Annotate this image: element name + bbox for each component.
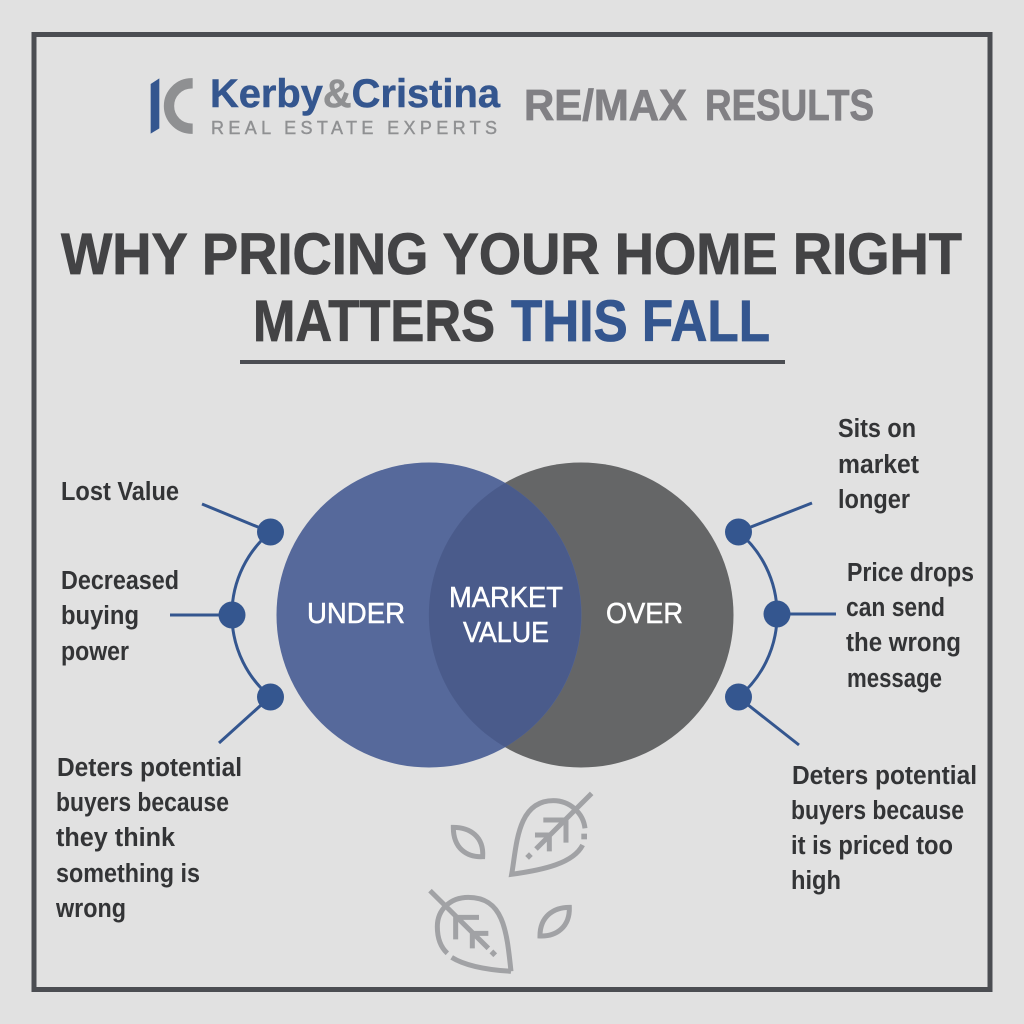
text: decreased buying power: Decreased: [61, 567, 179, 595]
text: deters potential buyers, right: Deters potential: [792, 762, 977, 790]
text: deters potential buyers, left: wrong: [55, 895, 126, 923]
icon: falling leaves: [430, 793, 592, 971]
icon: small leaf right: [540, 907, 569, 936]
text: deters potential buyers, left: they think: [56, 824, 176, 852]
logo: Kerby & Cristina: [151, 72, 501, 138]
brand name: Kerby&Cristina: [210, 72, 501, 116]
brand tagline: REAL ESTATE EXPERTS: [211, 118, 497, 138]
venn diagram: [276, 462, 734, 768]
icon: KC monogram: [151, 78, 193, 134]
text: decreased buying power: power: [61, 638, 129, 666]
icon: top leaf: [512, 793, 592, 874]
icon: bottom leaf: [430, 891, 511, 971]
title underline: [240, 360, 785, 364]
text: sits on market longer: [838, 415, 919, 514]
label: market value: [449, 582, 563, 649]
text: price drops: can send: [846, 594, 945, 622]
title line 1: WHY PRICING YOUR HOME RIGHT: [61, 222, 962, 287]
label: market value: VALUE: [463, 617, 549, 649]
text: deters potential buyers, left: something is: [56, 860, 200, 888]
text: price drops: Price drops: [847, 559, 974, 587]
label: under: UNDER: [307, 598, 405, 630]
logo: RE/MAX Results: [524, 81, 874, 130]
title line 2 blue: THIS FALL: [511, 289, 770, 354]
icon: small leaf left: [453, 827, 483, 857]
connectors: left: [170, 504, 284, 743]
text: deters potential buyers, left: buyers because: [56, 789, 229, 817]
title: [61, 222, 962, 354]
connectors: right: [725, 503, 836, 745]
text: deters potential buyers, right: buyers because: [791, 797, 964, 825]
text: price drops: [846, 559, 974, 693]
text: lost value: Lost Value: [61, 478, 179, 506]
text: decreased buying power: buying: [61, 602, 139, 630]
text: sits on market longer: longer: [838, 486, 910, 514]
text: price drops: the wrong: [846, 629, 961, 657]
text: decreased buying power: [61, 567, 179, 666]
logo: RE/MAX Results: RE/MAX: [524, 81, 687, 130]
text: deters potential buyers, left: Deters potential: [57, 754, 242, 782]
circle: over: [428, 462, 734, 768]
text: deters potential buyers, right: high: [791, 867, 841, 895]
logo: RE/MAX Results: RESULTS: [705, 81, 874, 130]
text: sits on market longer: market: [838, 451, 919, 479]
overlap: market value: [429, 483, 581, 747]
text: sits on market longer: Sits on: [838, 415, 916, 443]
text: deters potential buyers, right: [791, 762, 977, 895]
text: deters potential buyers, right: it is priced too: [791, 832, 953, 860]
circle: under: [276, 462, 582, 768]
title line 2 dark: MATTERS: [253, 289, 495, 354]
text: price drops: message: [847, 665, 942, 693]
label: over: OVER: [606, 598, 683, 630]
text: deters potential buyers, left: [55, 754, 242, 923]
label: market value: MARKET: [449, 582, 563, 614]
